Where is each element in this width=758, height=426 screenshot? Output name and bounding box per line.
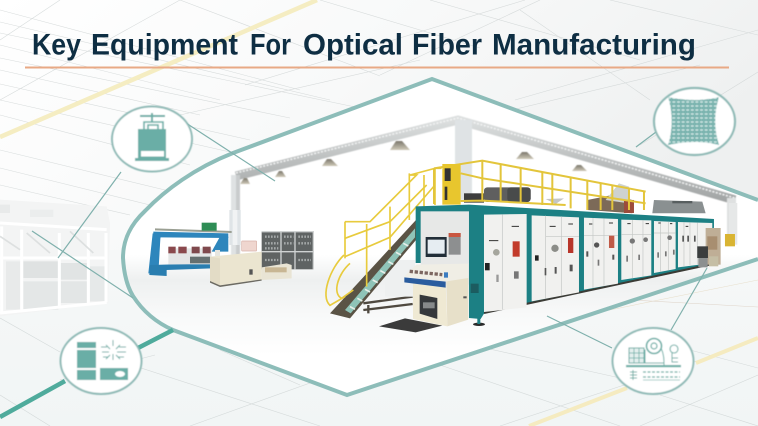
floor mat: [379, 318, 442, 332]
stair stringer: [330, 220, 416, 318]
connector lines: [32, 123, 707, 348]
door details: [513, 241, 520, 257]
title: Equipment: [91, 28, 238, 62]
hall outline: [123, 79, 758, 395]
deck equipment: [464, 193, 484, 203]
title: Fiber: [412, 28, 482, 62]
ceiling grid lines: [0, 0, 758, 215]
title: Key: [32, 28, 81, 62]
title: [32, 28, 696, 62]
floor reflection in hall: [126, 267, 726, 312]
stairs and console: [326, 168, 442, 318]
right-end machine and yellow box: [697, 203, 737, 267]
upper deck with railing: [434, 160, 706, 213]
teal side frame: [416, 205, 469, 263]
floor background: [0, 250, 758, 426]
icon: preform furnace: [112, 106, 192, 172]
green connector band: [0, 330, 173, 417]
icon: coating blocks: [60, 328, 142, 394]
dark base: [484, 264, 712, 313]
control console: [413, 281, 447, 326]
yellow rails: [326, 168, 442, 305]
left machine: blue frame winder: [148, 210, 313, 287]
overhead duct: [231, 118, 736, 255]
teal body: [469, 205, 714, 319]
icon: drawing tower: [612, 328, 694, 394]
stair supports: [363, 297, 413, 313]
title: Manufacturing: [492, 28, 696, 62]
main cabinet: [379, 205, 714, 332]
panel: central equipment hall: [100, 70, 758, 400]
ceiling lamps: [240, 141, 587, 184]
left wall behind stair: [394, 260, 415, 297]
door dividers: [502, 215, 697, 310]
control screen: [426, 237, 447, 257]
yellow column: [442, 164, 461, 205]
title underline: [25, 66, 729, 68]
indicator panel: [449, 233, 461, 255]
faded background machine: [0, 200, 110, 316]
title: For: [250, 28, 291, 62]
floor grid lines: [0, 280, 758, 426]
title: Optical: [303, 28, 403, 62]
door groups: [484, 214, 712, 312]
yellow band bottom: [529, 338, 758, 426]
railing: [434, 160, 646, 210]
icon: fiber mesh: [654, 88, 735, 155]
ceiling background: [0, 0, 758, 260]
yellow band top: [0, 0, 317, 137]
